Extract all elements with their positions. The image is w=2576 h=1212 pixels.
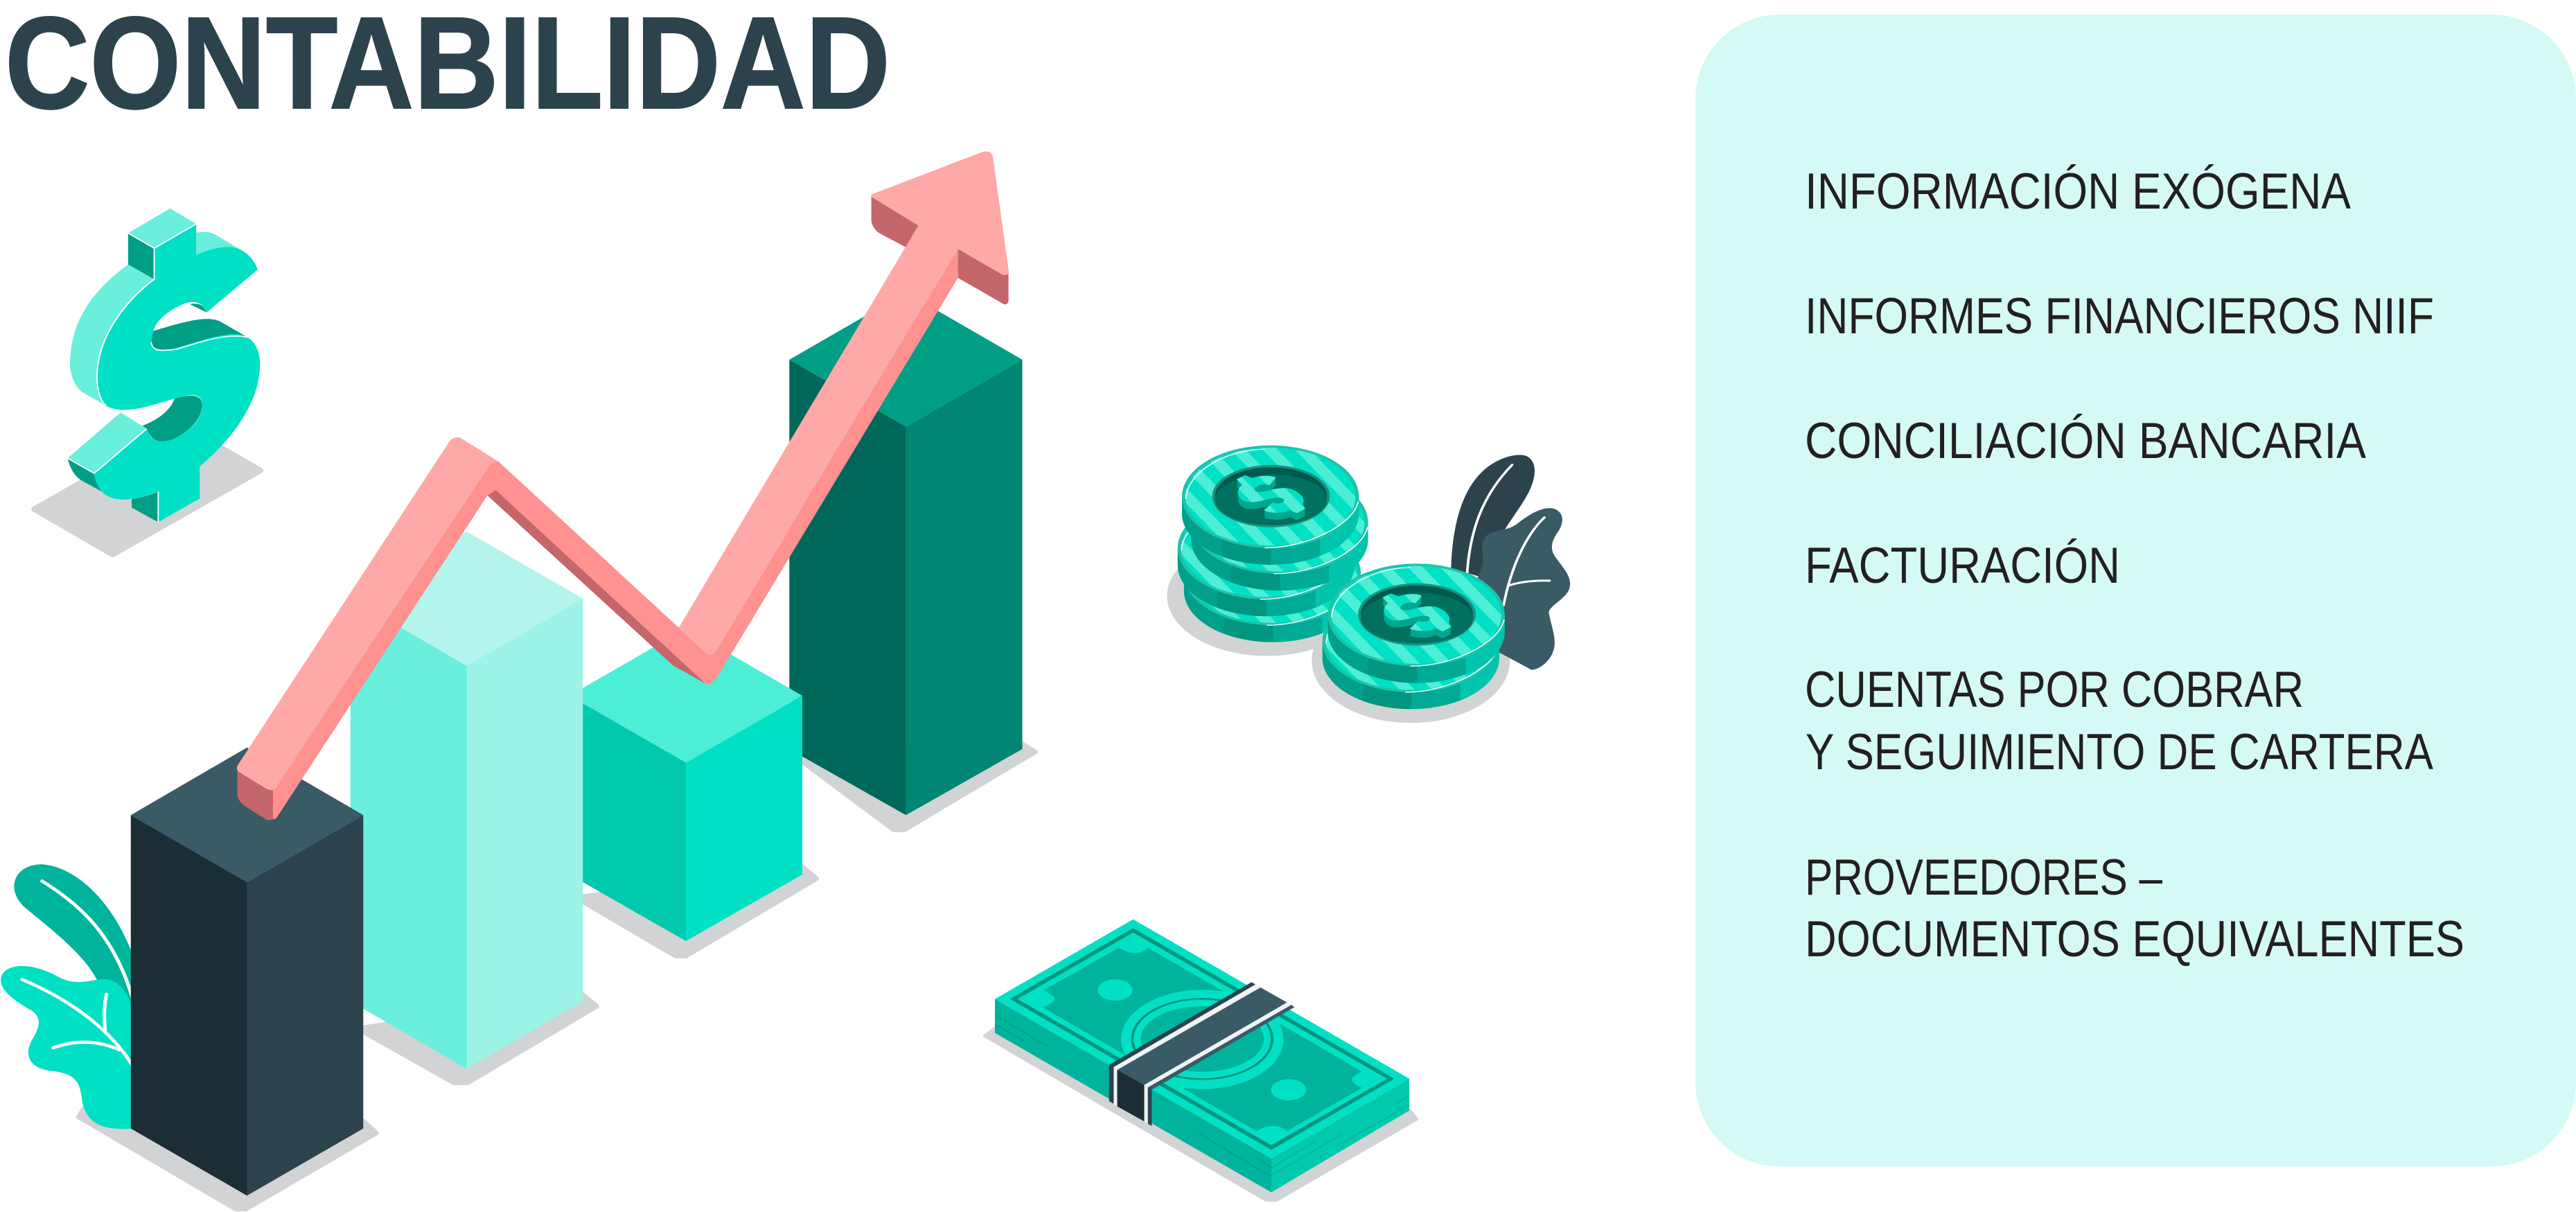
list item: conciliación bancaria: CONCILIACIÓN BANCARIA — [1805, 413, 2366, 469]
icon: coin stacks with dark leaves — [1167, 446, 1570, 723]
icon: isometric dollar sign — [35, 209, 261, 554]
left coin stack — [1178, 446, 1368, 643]
bar 4: dark green — [789, 292, 1036, 830]
list item: facturación: FACTURACIÓN — [1805, 538, 2120, 594]
bar 1: dark slate — [131, 748, 363, 1195]
coin shadows — [1167, 536, 1510, 723]
bar 3: teal — [570, 629, 817, 956]
list item: cuentas por cobrar y seguimiento de cartera — [1805, 662, 2433, 780]
bar 1 ground shadow — [78, 1109, 377, 1209]
plant: teal leaves behind bar 1 — [1, 864, 132, 1129]
list item: informes financieros NIIF: INFORMES FINANCIEROS NIIF — [1805, 288, 2434, 344]
right coin stack — [1323, 563, 1505, 710]
list item: proveedores, documentos equivalentes: PROVEEDORES – — [1805, 850, 2162, 906]
dark leaves — [1451, 455, 1570, 670]
list item: proveedores, documentos equivalentes — [1805, 850, 2464, 967]
icon: banded stack of banknotes — [985, 920, 1417, 1200]
list item: información exógena: INFORMACIÓN EXÓGENA — [1805, 164, 2351, 220]
list item: proveedores, documentos equivalentes: DOCUMENTOS EQUIVALENTES — [1805, 911, 2464, 967]
list item: cuentas por cobrar y seguimiento de cartera: Y SEGUIMIENTO DE CARTERA — [1806, 724, 2433, 780]
arrow: rising pink trend arrow — [237, 151, 1009, 820]
bar chart: isometric bars — [1, 292, 1036, 1209]
list item: cuentas por cobrar y seguimiento de cartera: CUENTAS POR COBRAR — [1805, 662, 2304, 718]
panel: services list — [1695, 15, 2576, 1167]
bar 2: light aqua — [351, 532, 597, 1083]
